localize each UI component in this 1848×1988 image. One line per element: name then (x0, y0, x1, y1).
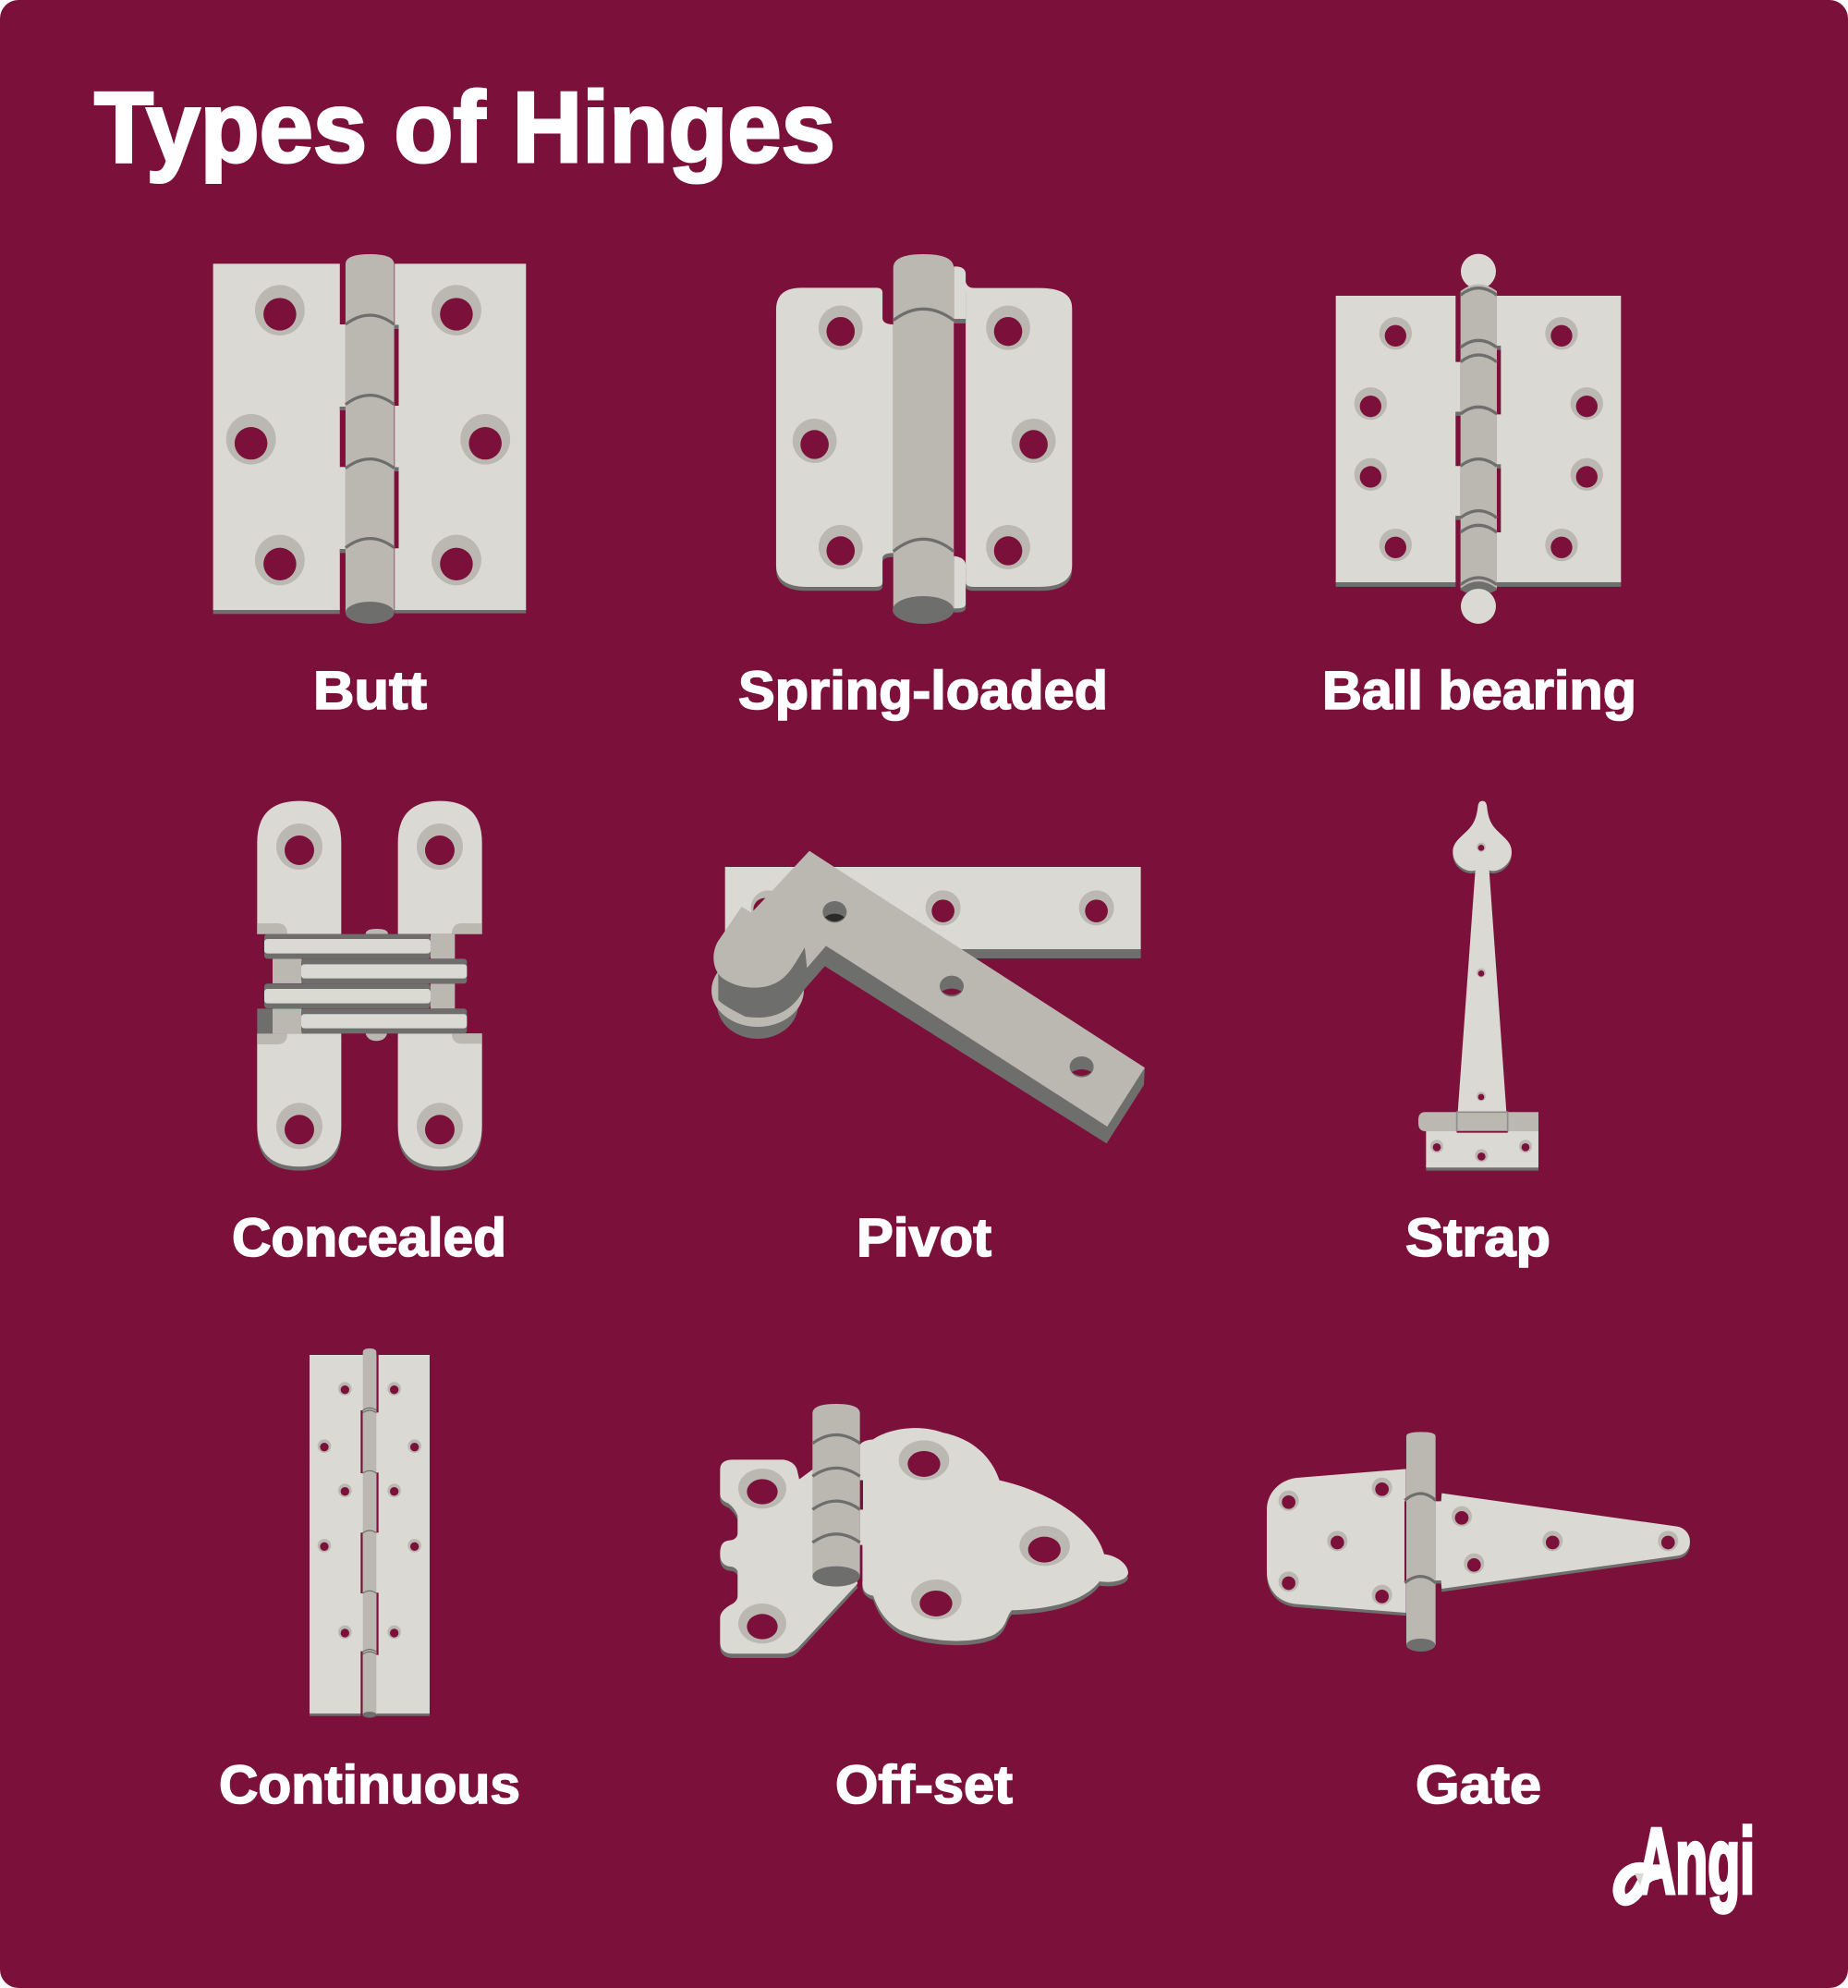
label: off-set: Off-set (835, 1755, 1013, 1815)
icon: concealed hinge (257, 801, 482, 1171)
label: strap: Strap (1405, 1208, 1550, 1268)
icon: gate hinge (1267, 1432, 1690, 1652)
label: gate: Gate (1416, 1755, 1541, 1815)
title: Types of Hinges (94, 71, 835, 184)
icon: off-set hinge (720, 1404, 1128, 1658)
label: pivot: Pivot (857, 1208, 991, 1268)
label: butt: Butt (313, 661, 427, 721)
icon: spring-loaded hinge (776, 254, 1072, 624)
label: ball bearing: Ball bearing (1322, 661, 1636, 721)
label: continuous: Continuous (219, 1755, 520, 1815)
logo: Angi (1619, 1810, 1755, 1913)
icon: pivot hinge (711, 851, 1145, 1143)
label: concealed: Concealed (232, 1208, 506, 1268)
icon: strap hinge (1418, 801, 1538, 1171)
icon: butt hinge (213, 254, 526, 624)
label: spring-loaded: Spring-loaded (738, 661, 1108, 721)
icon: continuous hinge (310, 1348, 430, 1718)
icon: ball bearing hinge (1336, 254, 1621, 624)
logo: Angi: Angi (1637, 1810, 1755, 1913)
